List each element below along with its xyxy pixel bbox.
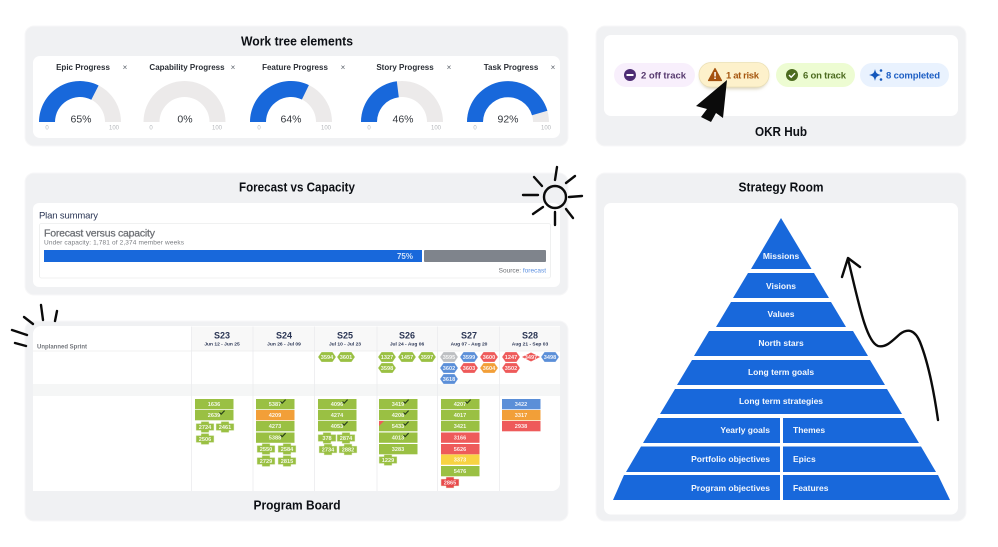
sprint S27 cards: 4017 [454, 413, 466, 419]
sprint S24 cards: 2815 [281, 459, 293, 465]
chart: strategy pyramid: Program objectives [691, 483, 770, 493]
panel: forecast vs capacity [25, 173, 568, 295]
sprint headers: Jun 12 - Jun 25 [204, 342, 240, 348]
sprint S24 cards [256, 399, 296, 466]
heading: program board: Program Board [254, 498, 341, 512]
sprint S26 cards: 4208 [392, 413, 404, 419]
gauge: epic progress [39, 63, 128, 132]
sprint S25 cards: 2882 [342, 448, 354, 454]
sprint headers: Aug 21 - Sep 03 [512, 342, 548, 348]
icon: hand-drawn spark lines [12, 305, 57, 346]
gauge: feature progress: 100 [321, 126, 332, 132]
gauge: capability progress: × [231, 63, 236, 72]
hexagon features row: 1457 [401, 355, 413, 361]
white OKR card [604, 35, 958, 116]
heading: strategy room: Strategy Room [738, 180, 824, 194]
sprint S26 cards: 4013 [392, 436, 404, 442]
sprint S28 cards [502, 399, 540, 431]
chart: strategy pyramid: Features [793, 483, 829, 493]
panel: work tree elements [25, 26, 568, 146]
sprint S26 cards: 3419 [392, 402, 404, 408]
chart: strategy pyramid: Long term strategies [739, 396, 823, 406]
hexagon features row: 3597 [421, 355, 433, 361]
gauge: story progress: × [447, 63, 452, 72]
sprint S27 cards: 3166 [454, 436, 466, 442]
gauge: capability progress: Capability Progress [149, 63, 225, 72]
sprint S25 cards: 2874 [340, 436, 353, 442]
pill: 2 off track [614, 63, 695, 87]
sprint headers: Aug 07 - Aug 20 [451, 342, 488, 348]
sprint S26 cards [379, 399, 418, 466]
sprint S24 cards: 2729 [260, 459, 272, 465]
hexagon features row: 3599 [463, 355, 475, 361]
sprint S27 cards: 2865 [444, 480, 456, 486]
icon: cursor arrow [696, 80, 727, 122]
chart: strategy pyramid: Portfolio objectives [691, 454, 770, 464]
chart: strategy pyramid: Epics [793, 454, 816, 464]
gauge: epic progress: × [123, 63, 128, 72]
sprint headers: Jul 24 - Aug 06 [390, 342, 424, 348]
sprint S23 cards: 2461 [219, 425, 231, 431]
sprint headers: S25 [337, 330, 353, 340]
pill: 1 at risk: 1 at risk [726, 70, 760, 82]
sprint S25 cards: 4274 [331, 413, 344, 419]
sprint S25 cards: 378 [322, 436, 332, 442]
icon: hand-drawn sun [523, 167, 582, 225]
panel: program board [25, 321, 568, 521]
sprint S25 cards: 4096 [331, 402, 343, 408]
gauge: capability progress: 0 [149, 126, 153, 132]
gauge: story progress [361, 63, 452, 132]
gauge: epic progress: Epic Progress [56, 63, 110, 72]
heading: forecast vs capacity: Forecast vs Capacity [239, 180, 356, 194]
text: plan summary: Plan summary [39, 210, 98, 222]
chart: forecast versus capacity: 75% [397, 252, 413, 261]
chart: forecast versus capacity: Under capacity: 1,781 of 2,374 member weeks [44, 240, 185, 246]
sprint S27 cards: 5626 [454, 447, 466, 453]
sprint S25 cards [318, 399, 357, 455]
gauge: task progress: 92% [497, 114, 519, 126]
sprint S24 cards: 2550 [260, 447, 272, 453]
gauge: task progress: 0 [473, 126, 477, 132]
sprint headers: S28 [522, 330, 538, 340]
gauge: story progress: 100 [431, 126, 442, 132]
pill: 1 at risk [699, 62, 769, 89]
gauge: capability progress: 0% [177, 114, 193, 126]
hexagon features row: 3600 [483, 355, 495, 361]
gauge: feature progress: Feature Progress [262, 63, 328, 72]
chart: strategy pyramid: Long term goals [748, 367, 814, 377]
sprint S23 cards: 1636 [208, 402, 220, 408]
pill: 6 on track [776, 63, 855, 87]
hexagon features row: 3603 [463, 366, 475, 372]
gauge: epic progress: 65% [70, 114, 92, 126]
gauge: task progress [467, 63, 556, 132]
chart: strategy pyramid [613, 218, 950, 500]
white pyramid card [604, 203, 958, 514]
hexagon features row: 3618 [443, 377, 455, 383]
sprint S27 cards: 5476 [454, 469, 466, 475]
chart: strategy pyramid: Visions [766, 281, 796, 291]
sprint S24 cards: 5387 [269, 402, 281, 408]
hexagon features row: 3498 [544, 355, 556, 361]
sprint S23 cards [195, 399, 234, 444]
sprint S24 cards: 5388 [269, 436, 281, 442]
white gauge card [33, 56, 560, 138]
gauge: story progress: 0 [367, 126, 371, 132]
chart: strategy pyramid: Missions [763, 251, 799, 261]
label: unplanned sprint: Unplanned Sprint [37, 344, 87, 350]
sprint S23 cards: 2724 [199, 425, 212, 431]
arrow: hand-drawn squiggle [842, 258, 938, 420]
sprint S27 cards [441, 399, 480, 488]
chart: forecast versus capacity: Forecast versus capacity [44, 228, 156, 240]
white plan summary card [33, 203, 560, 287]
sprint headers [204, 330, 548, 348]
gauge: epic progress: 0 [45, 126, 49, 132]
gauge: capability progress: 100 [212, 126, 223, 132]
pill: 6 on track: 6 on track [803, 70, 847, 82]
hexagon features row [318, 352, 559, 384]
sprint S24 cards: 4273 [269, 424, 281, 430]
gauge: task progress: 100 [541, 126, 552, 132]
gauge: story progress: Story Progress [376, 63, 434, 72]
gauge: story progress: 46% [392, 114, 414, 126]
sprint S26 cards: 1229 [382, 458, 394, 464]
hexagon features row: 3604 [483, 366, 496, 372]
chart: strategy pyramid: North stars [758, 338, 804, 348]
chart: strategy pyramid: Themes [793, 425, 825, 435]
sprint headers: S26 [399, 330, 415, 340]
heading: OKR Hub: OKR Hub [755, 124, 807, 139]
chart: strategy pyramid: Values [768, 309, 795, 319]
sprint headers: Jul 10 - Jul 23 [329, 342, 361, 348]
sprint S27 cards: 3421 [454, 424, 466, 430]
sprint S26 cards: 5433 [392, 424, 404, 430]
sprint S23 cards: 2506 [199, 437, 211, 443]
sprint headers: S24 [276, 330, 292, 340]
sprint S25 cards: 2734 [322, 448, 335, 454]
sprint S27 cards: 4207 [454, 402, 466, 408]
sprint S23 cards: 2639 [208, 413, 220, 419]
sprint headers: Jun 26 - Jul 09 [267, 342, 301, 348]
board grid [33, 326, 560, 491]
sprint S28 cards: 3422 [515, 402, 527, 408]
hexagon features row: 3502 [505, 366, 517, 372]
sprint S28 cards: 3317 [515, 413, 527, 419]
gauge: task progress: Task Progress [484, 63, 539, 72]
panel: strategy room [596, 173, 966, 521]
sprint S28 cards: 2938 [515, 424, 527, 430]
hexagon features row: 3598 [381, 366, 393, 372]
gauge: epic progress: 100 [109, 126, 120, 132]
hexagon features row: 3497 [525, 355, 537, 361]
gauge: feature progress: 64% [280, 114, 302, 126]
hexagon features row: 3602 [443, 366, 455, 372]
chart: forecast versus capacity [40, 224, 550, 278]
sprint headers: S27 [461, 330, 477, 340]
sprint headers: S23 [214, 330, 230, 340]
gauge: capability progress [144, 63, 236, 132]
hexagon features row: 1247 [505, 355, 517, 361]
chart: forecast versus capacity: Source: forecast [499, 268, 546, 274]
sprint S24 cards: 2584 [281, 447, 294, 453]
pill: 2 off track: 2 off track [641, 70, 687, 82]
hexagon features row: 1327 [381, 355, 393, 361]
hexagon features row: 3595 [443, 355, 455, 361]
hexagon features row: 3601 [340, 355, 352, 361]
sprint S25 cards: 4053 [331, 424, 343, 430]
gauge: feature progress [250, 63, 346, 132]
hexagon features row: 3594 [321, 355, 334, 361]
gauge: feature progress: 0 [257, 126, 261, 132]
pill: 8 completed: 8 completed [886, 70, 940, 82]
gauge: task progress: × [551, 63, 556, 72]
chart: strategy pyramid: Yearly goals [720, 425, 770, 435]
heading: work tree elements: Work tree elements [241, 34, 353, 48]
sprint S26 cards: 3283 [392, 447, 404, 453]
pill: 8 completed [860, 63, 949, 87]
panel: OKR hub [596, 26, 966, 146]
sprint S24 cards: 4209 [269, 413, 281, 419]
sprint S27 cards: 3373 [454, 458, 466, 464]
gauge: feature progress: × [341, 63, 346, 72]
